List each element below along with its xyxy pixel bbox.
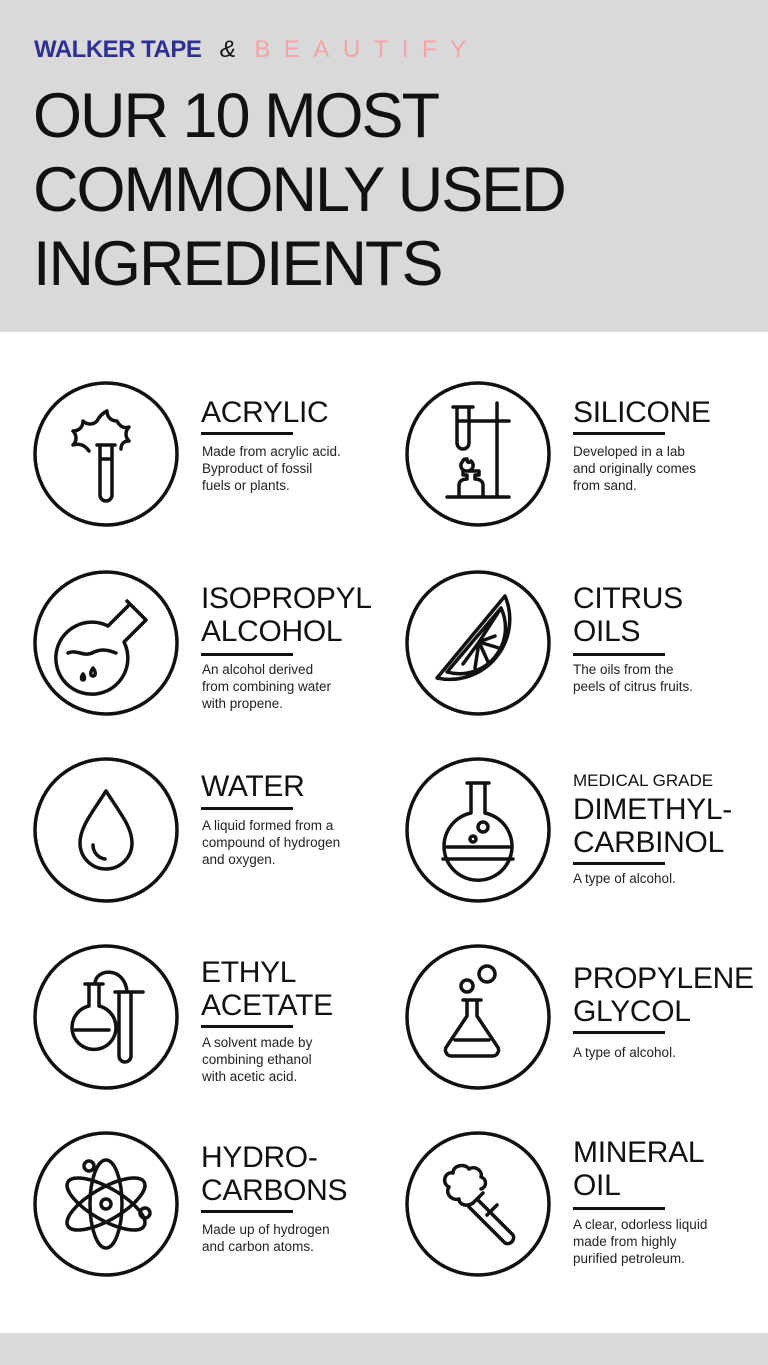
text: A solvent made by bbox=[202, 1035, 312, 1050]
item: dimethylcarbinol bbox=[405, 757, 551, 903]
title: OUR 10 MOST bbox=[33, 81, 438, 151]
text: A liquid formed from a bbox=[202, 818, 333, 833]
icon: test tube over burner bbox=[405, 381, 551, 527]
text: combining ethanol bbox=[202, 1052, 312, 1067]
text: ISOPROPYL bbox=[201, 582, 372, 615]
text: peels of citrus fruits. bbox=[573, 679, 693, 694]
text: Made up of hydrogen bbox=[202, 1222, 330, 1237]
text: MINERAL bbox=[573, 1136, 704, 1169]
text: OILS bbox=[573, 615, 640, 648]
text: A clear, odorless liquid bbox=[573, 1217, 707, 1232]
icon: round flask bbox=[33, 570, 179, 716]
text: Byproduct of fossil bbox=[202, 461, 312, 476]
text: SILICONE bbox=[573, 396, 711, 429]
text: WATER bbox=[201, 770, 304, 803]
icon: atom bbox=[33, 1131, 179, 1277]
text: with acetic acid. bbox=[202, 1069, 297, 1084]
text: with propene. bbox=[202, 696, 283, 711]
text: PROPYLENE bbox=[573, 962, 754, 995]
icon: flask with bubbles bbox=[405, 757, 551, 903]
text: OIL bbox=[573, 1169, 620, 1202]
text: GLYCOL bbox=[573, 995, 691, 1028]
title bbox=[33, 81, 565, 299]
text: A type of alcohol. bbox=[573, 871, 676, 886]
icon: flask and tube bbox=[33, 944, 179, 1090]
text: purified petroleum. bbox=[573, 1251, 685, 1266]
text: The oils from the bbox=[573, 662, 674, 677]
text: and originally comes bbox=[573, 461, 696, 476]
title: COMMONLY USED bbox=[33, 155, 565, 225]
item: isopropyl alcohol bbox=[33, 570, 179, 716]
text: and oxygen. bbox=[202, 852, 276, 867]
icon: conical flask with bubbles bbox=[405, 944, 551, 1090]
logo: WALKER TAPE & BEAUTIFY bbox=[34, 36, 480, 63]
item: acrylic bbox=[33, 381, 179, 527]
text: ETHYL bbox=[201, 956, 296, 989]
text: CITRUS bbox=[573, 582, 683, 615]
text: DIMETHYL- bbox=[573, 793, 732, 826]
title: INGREDIENTS bbox=[33, 229, 442, 299]
text: CARBONS bbox=[201, 1174, 347, 1207]
icon: test tube burst bbox=[33, 381, 179, 527]
item: water bbox=[33, 757, 179, 903]
text: from sand. bbox=[573, 478, 637, 493]
text: HYDRO- bbox=[201, 1141, 318, 1174]
item: hydrocarbons bbox=[33, 1131, 179, 1277]
header panel bbox=[0, 0, 768, 332]
text: ACETATE bbox=[201, 989, 333, 1022]
footer bar bbox=[0, 1333, 768, 1365]
text: and carbon atoms. bbox=[202, 1239, 314, 1254]
item: citrus oils bbox=[405, 570, 551, 716]
icon: tube with smoke bbox=[405, 1131, 551, 1277]
text: compound of hydrogen bbox=[202, 835, 340, 850]
text: An alcohol derived bbox=[202, 662, 313, 677]
text: from combining water bbox=[202, 679, 331, 694]
text: ALCOHOL bbox=[201, 615, 342, 648]
text: A type of alcohol. bbox=[573, 1045, 676, 1060]
item: ethyl acetate bbox=[33, 944, 179, 1090]
text: ACRYLIC bbox=[201, 396, 328, 429]
text: MEDICAL GRADE bbox=[573, 771, 713, 790]
item: silicone bbox=[405, 381, 551, 527]
text: CARBINOL bbox=[573, 826, 724, 859]
text: Made from acrylic acid. bbox=[202, 444, 341, 459]
item: mineral oil bbox=[405, 1131, 551, 1277]
item: propylene glycol bbox=[405, 944, 551, 1090]
text: Developed in a lab bbox=[573, 444, 685, 459]
text: fuels or plants. bbox=[202, 478, 290, 493]
icon: water drop bbox=[33, 757, 179, 903]
icon: citrus slice bbox=[405, 570, 551, 716]
text: made from highly bbox=[573, 1234, 677, 1249]
